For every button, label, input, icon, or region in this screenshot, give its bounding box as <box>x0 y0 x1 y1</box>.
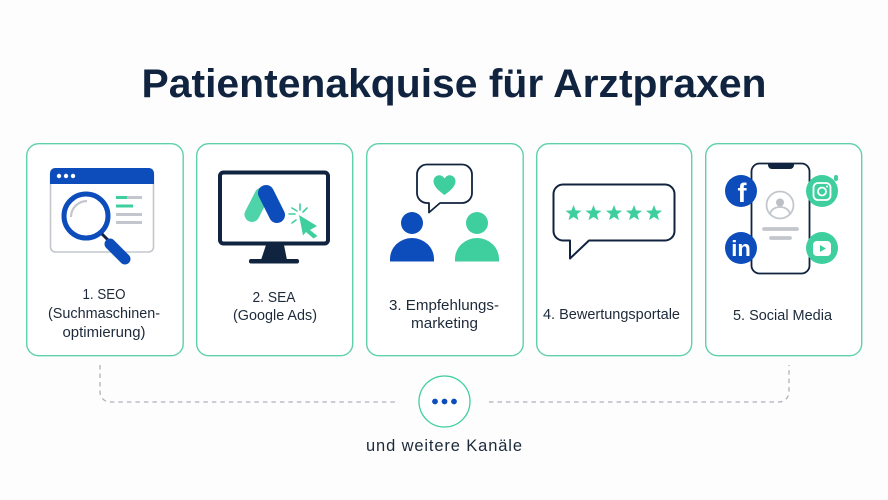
icon: LinkedIn <box>725 232 757 264</box>
icon: Facebook <box>725 175 757 208</box>
icon: YouTube <box>806 232 838 264</box>
label: Bewertungsportale: 4. Bewertungsportale <box>543 307 680 323</box>
label: SEO <box>48 287 160 341</box>
connector: right dashed bracket <box>489 365 789 402</box>
panel: Social Media <box>706 144 862 356</box>
label: SEO: 1. SEO <box>82 287 126 303</box>
panel: SEA <box>197 144 353 356</box>
icon: speech bubble with stars <box>554 184 674 258</box>
panel: SEO <box>27 144 183 356</box>
icon: browser with magnifier <box>50 168 154 259</box>
icon: LinkedIn: in <box>731 236 751 261</box>
caption: und weitere Kanäle <box>366 437 522 455</box>
label: Empfehlungsmarketing: marketing <box>411 316 478 332</box>
icon: Facebook: f <box>738 178 748 208</box>
panel: Empfehlungsmarketing <box>367 144 523 356</box>
label: Empfehlungsmarketing <box>389 298 499 332</box>
title: Patientenakquise für Arztpraxen <box>142 62 766 106</box>
more channels badge <box>419 376 470 427</box>
icon: two people <box>390 212 499 262</box>
panel: Bewertungsportale <box>537 144 692 356</box>
label: SEA: (Google Ads) <box>233 308 317 324</box>
label: SEO: (Suchmaschinen- <box>48 306 160 322</box>
icon: speech bubble with heart <box>417 164 472 212</box>
label: SEA <box>233 290 317 324</box>
icon: smartphone with profile <box>752 163 810 274</box>
label: Empfehlungsmarketing: 3. Empfehlungs- <box>389 298 499 314</box>
icon: monitor with ads logo <box>220 172 328 264</box>
label: SEA: 2. SEA <box>252 290 296 306</box>
label: Social Media: 5. Social Media <box>733 308 833 324</box>
connector: left dashed bracket <box>100 365 399 402</box>
label: SEO: optimierung) <box>62 325 146 341</box>
icon: Instagram <box>806 175 838 207</box>
